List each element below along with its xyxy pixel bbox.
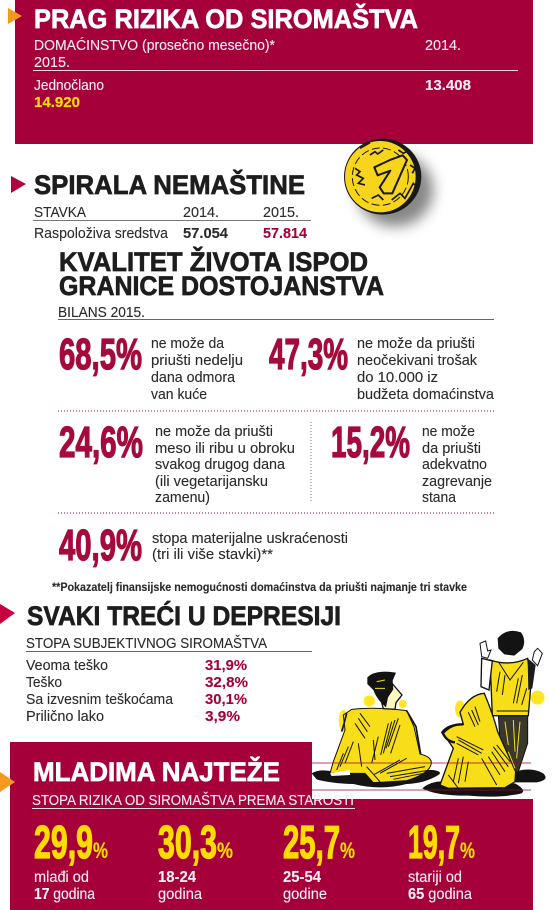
stat: 25,7% 25-54: godine: [283, 886, 327, 903]
subheading: bilans: BILANS 2015.: [58, 304, 145, 321]
stat: 40,9%: stopa materijalne uskraćenosti: [152, 530, 348, 547]
table row: single-person household: 13.408: [425, 77, 471, 94]
table row: single-person household: [34, 77, 471, 111]
table: available funds: Raspoloživa sredstva: [34, 225, 169, 242]
stat: 68,5%: ne može da: [151, 335, 225, 352]
stat: 30,3% 18-24: 30,3: [158, 816, 217, 868]
table: available funds: [33, 204, 311, 242]
stat: 29,9% young: mlađi od: [34, 869, 89, 886]
stat: 47,3%: [269, 330, 495, 403]
arrow: orange marker: [8, 8, 22, 24]
stat: 30,3% 18-24: 18-24: [158, 869, 196, 886]
stat: 29,9% young: 29,9: [34, 816, 93, 868]
table header: 2014.: [425, 37, 461, 54]
stat: 19,7% older: 19,7: [408, 816, 460, 868]
illustration: seated figures: [312, 631, 546, 797]
stat: 19,7% older: [408, 816, 475, 903]
stat: 40,9%: (tri ili više stavki)**: [152, 546, 273, 563]
table: subjective poverty rates: 30,1%: [205, 691, 247, 708]
figure: seated man, left: [312, 672, 440, 787]
stat: 68,5%: 68,5%: [59, 330, 142, 379]
stat: 30,3% 18-24: [158, 816, 233, 903]
stat: 24,6%: [59, 418, 295, 506]
arrow: crimson marker: [0, 604, 15, 624]
stat: 30,3% 18-24: %: [217, 838, 233, 863]
stat: 24,6%: zamenu): [155, 489, 210, 506]
stat: 15,2%: ne može: [422, 423, 475, 440]
stat: 24,6%: meso ili ribu u obroku: [155, 440, 295, 457]
table: subjective poverty rates: Teško: [26, 674, 62, 691]
table: subjective poverty rates: [26, 657, 248, 725]
heading: svaki treci: SVAKI TREĆI U DEPRESIJI: [27, 600, 341, 631]
heading: prag rizika: PRAG RIZIKA OD SIROMAŠTVA: [34, 3, 418, 34]
panel: quality of life: [52, 246, 495, 594]
heading: kvalitet zivota: KVALITET ŽIVOTA ISPOD: [59, 246, 368, 277]
stat: 68,5%: van kuće: [151, 386, 207, 403]
stat: 25,7% 25-54: [283, 816, 355, 903]
table: available funds: STAVKA: [34, 204, 86, 221]
stat: 40,9%: [59, 521, 348, 570]
stat: 25,7% 25-54: 25,7: [283, 816, 340, 868]
stat: 68,5%: [59, 330, 243, 403]
heading: mladima najteze: MLADIMA NAJTEŽE: [33, 756, 280, 787]
table: subjective poverty rates: 3,9%: [205, 708, 240, 725]
stat: 29,9% young: 17 godina: [34, 886, 95, 903]
stat: 24,6%: 24,6%: [59, 418, 143, 467]
stat: 24,6%: svakog drugog dana: [155, 456, 286, 473]
heading: spirala nemastine: SPIRALA NEMAŠTINE: [34, 169, 305, 200]
stat: 25,7% 25-54: 25-54: [283, 869, 321, 886]
stat: 29,9% young: %: [93, 838, 108, 863]
arrow: crimson marker: [11, 176, 26, 193]
stat: 19,7% older: %: [460, 838, 475, 863]
panel: svaki treci u depresiji: [0, 600, 341, 725]
stat: 15,2%: [331, 418, 492, 506]
table header: DOMAĆINSTVO (prosečno mesečno)*: [34, 37, 275, 54]
stat: 24,6%: ne može da priušti: [155, 423, 273, 440]
stat: 15,2%: adekvatno: [422, 456, 487, 473]
stat: 25,7% 25-54: %: [340, 838, 355, 863]
table header: [34, 37, 461, 71]
stat: 19,7% older: 65 godina: [408, 886, 472, 903]
subheading: subjective poverty: STOPA SUBJEKTIVNOG SIROMAŠTVA: [26, 635, 267, 652]
table row: single-person household: Jednočlano: [34, 77, 104, 94]
table header: 2015.: [34, 54, 70, 71]
panel: mladima najteze: [0, 742, 533, 910]
subheading: risk rate by age: STOPA RIZIKA OD SIROMAŠTVA PREMA STAROSTI: [32, 792, 354, 809]
footnote: **Pokazatelj finansijske nemogućnosti domaćinstva da priušti najmanje tri stavke: [52, 580, 467, 594]
stat: 30,3% 18-24: godina: [158, 886, 202, 903]
stat: 15,2%: zagrevanje: [422, 473, 492, 490]
table: subjective poverty rates: 32,8%: [205, 674, 248, 691]
stat: 47,3%: do 10.000 iz: [357, 369, 438, 386]
stat: 24,6%: (ili vegetarijansku: [155, 473, 268, 490]
stat: 19,7% older: stariji od: [408, 869, 462, 886]
table: subjective poverty rates: 31,9%: [205, 657, 247, 674]
stat: 40,9%: 40,9%: [59, 521, 142, 570]
table: available funds: 2014.: [183, 204, 219, 221]
stat: 47,3%: budžeta domaćinstva: [357, 386, 495, 403]
figure: crouching and standing, right: [422, 631, 546, 797]
heading: kvalitet zivota: GRANICE DOSTOJANSTVA: [59, 271, 384, 301]
stat: 29,9% young: [34, 816, 108, 903]
stat: 15,2%: 15,2%: [331, 418, 410, 467]
stat: 47,3%: ne može da priušti: [357, 335, 475, 352]
table: available funds: 57.814: [263, 225, 308, 242]
table: subjective poverty rates: Prilično lako: [26, 708, 104, 725]
stat: 15,2%: stana: [422, 489, 457, 506]
stat: 47,3%: neočekivani trošak: [357, 352, 477, 369]
icon: gold coin: [344, 139, 433, 227]
stat: 68,5%: dana odmora: [151, 369, 236, 386]
panel: poverty risk threshold: [8, 0, 533, 144]
arrow: orange marker: [0, 772, 15, 792]
stat: 68,5%: priušti nedelju: [151, 352, 243, 369]
table row: single-person household: 14.920: [34, 94, 80, 111]
panel: spirala nemastine: [11, 169, 311, 242]
stat: 15,2%: da priušti: [422, 440, 481, 457]
table: subjective poverty rates: Veoma teško: [26, 657, 108, 674]
table: available funds: 57.054: [183, 225, 229, 242]
table: available funds: 2015.: [263, 204, 299, 221]
ground lines: [312, 763, 531, 790]
stat: 47,3%: 47,3%: [269, 330, 348, 379]
table: subjective poverty rates: Sa izvesnim teškoćama: [26, 691, 174, 708]
heading: kvalitet zivota: [59, 246, 384, 301]
